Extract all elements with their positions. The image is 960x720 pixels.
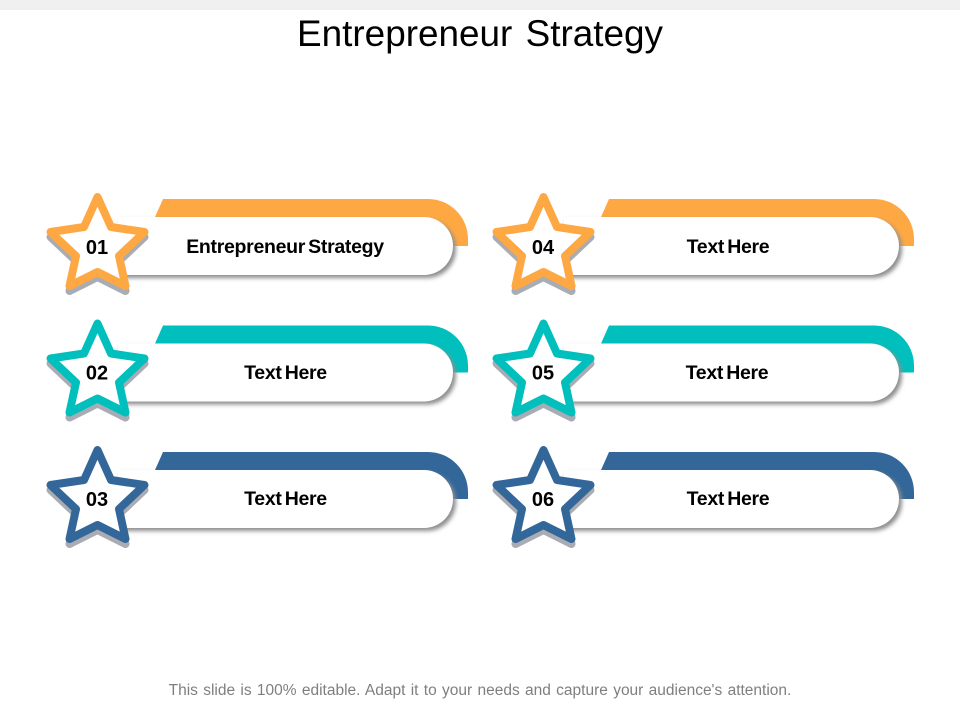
label: Text Here xyxy=(687,488,770,510)
label: Text Here xyxy=(686,362,769,384)
band: orange xyxy=(601,199,914,246)
item 04 xyxy=(496,197,914,291)
band: teal xyxy=(155,326,468,372)
pill shadow xyxy=(120,473,456,531)
pill shadow xyxy=(120,220,456,278)
title: Entrepreneur Strategy xyxy=(297,13,663,54)
label: Entrepreneur Strategy xyxy=(186,236,384,258)
item 02 xyxy=(50,324,468,418)
band: blue xyxy=(601,452,914,499)
item 03 xyxy=(50,450,468,544)
label: Text Here xyxy=(244,362,327,384)
pill xyxy=(564,217,899,275)
label: Text Here xyxy=(687,236,770,258)
star: 05 xyxy=(496,324,590,418)
item 05 xyxy=(496,324,914,418)
star: 06 xyxy=(496,450,590,544)
number 02: 02 xyxy=(86,362,108,384)
band: teal xyxy=(601,326,914,372)
pill xyxy=(118,217,453,275)
number 04: 04 xyxy=(532,237,555,259)
pill shadow xyxy=(566,346,902,404)
star: 02 xyxy=(50,324,144,418)
pill xyxy=(564,344,899,402)
pill shadow xyxy=(566,220,902,278)
footer note: This slide is 100% editable. Adapt it to your needs and capture your audience's attention. xyxy=(169,682,791,699)
number 03: 03 xyxy=(86,489,108,511)
item 01 xyxy=(50,197,468,291)
star: 01 xyxy=(50,197,144,291)
band: blue xyxy=(155,452,468,499)
band: orange xyxy=(155,199,468,246)
pill shadow xyxy=(566,473,902,531)
pill xyxy=(564,470,899,528)
pill xyxy=(118,470,453,528)
number 01: 01 xyxy=(86,237,108,259)
star: 03 xyxy=(50,450,144,544)
pill shadow xyxy=(120,346,456,404)
number 05: 05 xyxy=(532,362,554,384)
number 06: 06 xyxy=(532,489,554,511)
pill xyxy=(118,344,453,402)
star: 04 xyxy=(496,197,590,291)
label: Text Here xyxy=(244,488,327,510)
item 06 xyxy=(496,450,914,544)
